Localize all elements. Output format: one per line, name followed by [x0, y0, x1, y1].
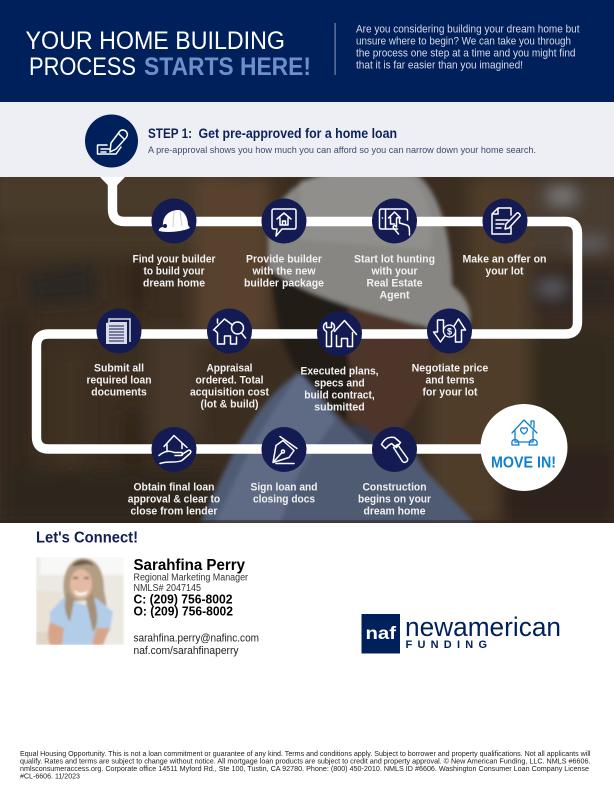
intro paragraph — [356, 24, 580, 72]
step label: negotiate price: Negotiate price — [412, 363, 488, 375]
step label: find your builder: dream home — [143, 278, 205, 290]
step path line — [36, 177, 578, 449]
agent contact details: naf.com/sarahfinaperry — [134, 645, 239, 657]
step label: make an offer: your lot — [486, 266, 524, 278]
step label: construction — [358, 482, 432, 518]
step label: submit documents — [86, 363, 152, 399]
step label: negotiate price — [412, 363, 488, 399]
step label: appraisal: Appraisal — [206, 363, 252, 375]
agent contact details: sarahfina.perry@nafinc.com — [134, 633, 259, 645]
legal disclaimer — [20, 749, 591, 780]
icon: tablet and hand — [372, 198, 417, 244]
intro paragraph: unsure where to begin? We can take you through — [356, 36, 571, 48]
icon: hammer — [372, 427, 417, 472]
icon: price arrows — [427, 308, 472, 354]
step label: executed plans: specs and — [314, 378, 365, 390]
step label: executed plans: Executed plans, — [300, 366, 378, 378]
step label: final approval — [128, 482, 220, 518]
step 1 heading: STEP 1: — [148, 126, 192, 141]
step label: negotiate price: and terms — [426, 375, 474, 387]
header divider — [335, 23, 336, 75]
step label: lot hunting: with your — [371, 266, 418, 278]
company logo: naf — [366, 623, 396, 643]
step label: builder package: with the new — [252, 266, 316, 278]
step label: construction: Construction — [362, 482, 427, 494]
step label: sign loan: Sign loan and — [250, 482, 318, 494]
legal disclaimer: qualify. Rates and terms are subject to change without notice. All mortgage loan products are subject to credit and property approval. © New American Funding, LLC. NMLS #6606. — [20, 756, 590, 766]
step label: submit documents: documents — [91, 387, 147, 399]
icon: price arrows: $ — [447, 326, 452, 336]
legal disclaimer: nmlsconsumeraccess.org. Corporate office 14511 Myford Rd., Ste 100, Tustin, CA 92780. Phone: (800) 450-2010. NMLS ID #6606. Washington Consumer Loan Company License — [20, 764, 589, 773]
step 1 band — [0, 102, 614, 177]
background photo: builder in hard hat — [0, 170, 614, 523]
step label: find your builder: to build your — [144, 266, 205, 278]
step label: find your builder: Find your builder — [132, 254, 216, 266]
step label: lot hunting: Real Estate — [366, 278, 422, 290]
agent contact details: Sarahfina Perry — [134, 557, 245, 574]
icon: wrench and house — [317, 311, 362, 356]
step label: lot hunting: Agent — [380, 290, 410, 302]
step label: submit documents: required loan — [86, 375, 152, 387]
step label: find your builder — [132, 254, 216, 290]
step label: negotiate price: for your lot — [422, 387, 478, 399]
icon: house and magnifier — [207, 308, 252, 354]
step label: final approval: close from lender — [130, 506, 218, 518]
step label: construction: begins on your — [358, 494, 432, 506]
step label: executed plans: submitted — [314, 402, 365, 414]
step label: lot hunting: Start lot hunting — [354, 254, 435, 266]
step label: executed plans: build contract, — [304, 390, 375, 402]
step 1 description: A pre-approval shows you how much you can afford so you can narrow down your home search. — [148, 145, 536, 156]
agent contact details — [134, 557, 259, 657]
step 1 pointer — [100, 177, 125, 190]
icon: hard hat — [152, 198, 196, 244]
icon: contract and pencil — [482, 198, 528, 244]
title: PROCESS — [29, 53, 136, 81]
company logo — [362, 612, 561, 654]
step label: submit documents: Submit all — [94, 363, 144, 375]
step label: make an offer — [462, 254, 547, 278]
step label: final approval: approval & clear to — [128, 494, 220, 506]
step label: appraisal: acquisition cost — [190, 387, 269, 399]
contact heading: Let's Connect! — [36, 530, 138, 547]
step label: appraisal: (lot & build) — [200, 399, 259, 411]
legal disclaimer: #CL-6606. 11/2023 — [20, 772, 80, 780]
title — [26, 27, 311, 81]
move in badge: MOVE IN! — [491, 455, 556, 472]
step label: executed plans — [300, 366, 378, 414]
agent contact details: Regional Marketing Manager — [134, 572, 249, 583]
company logo: FUNDING — [406, 639, 487, 651]
agent contact details: NMLS# 2047145 — [134, 583, 201, 594]
move in badge — [480, 404, 568, 491]
step label: sign loan: closing docs — [253, 494, 315, 506]
step 1 heading: Get pre-approved for a home loan — [198, 126, 397, 141]
step label: make an offer: Make an offer on — [462, 254, 547, 266]
icon: house with heart — [512, 420, 537, 445]
header band — [0, 0, 614, 102]
intro paragraph: the process one step at a time and you might find — [356, 48, 576, 60]
step label: construction: dream home — [364, 506, 426, 518]
step label: appraisal — [190, 363, 269, 411]
step label: sign loan — [250, 482, 318, 506]
icon: document stack — [96, 308, 142, 354]
agent portrait — [36, 557, 124, 645]
title: STARTS HERE! — [144, 53, 311, 81]
intro paragraph: that it is far easier than you imagined! — [356, 60, 523, 72]
step label: builder package: builder package — [244, 278, 324, 290]
icon: pen nib — [262, 427, 306, 472]
step label: lot hunting — [354, 254, 435, 302]
step label: appraisal: ordered. Total — [196, 375, 264, 387]
agent contact details: O: (209) 756-8002 — [134, 605, 233, 619]
step label: builder package — [244, 254, 324, 290]
step label: final approval: Obtain final loan — [134, 482, 215, 494]
title: YOUR HOME BUILDING — [26, 27, 285, 55]
step label: builder package: Provide builder — [246, 254, 323, 266]
man: hair, face, shirt — [200, 170, 475, 523]
company logo: newamerican — [405, 612, 561, 642]
icon: house in hand — [152, 427, 196, 472]
agent contact details: C: (209) 756-8002 — [134, 592, 233, 606]
step 1 icon: pen and check — [85, 114, 138, 168]
intro paragraph: Are you considering building your dream home but — [356, 24, 580, 36]
icon: speech bubble house — [262, 198, 306, 244]
